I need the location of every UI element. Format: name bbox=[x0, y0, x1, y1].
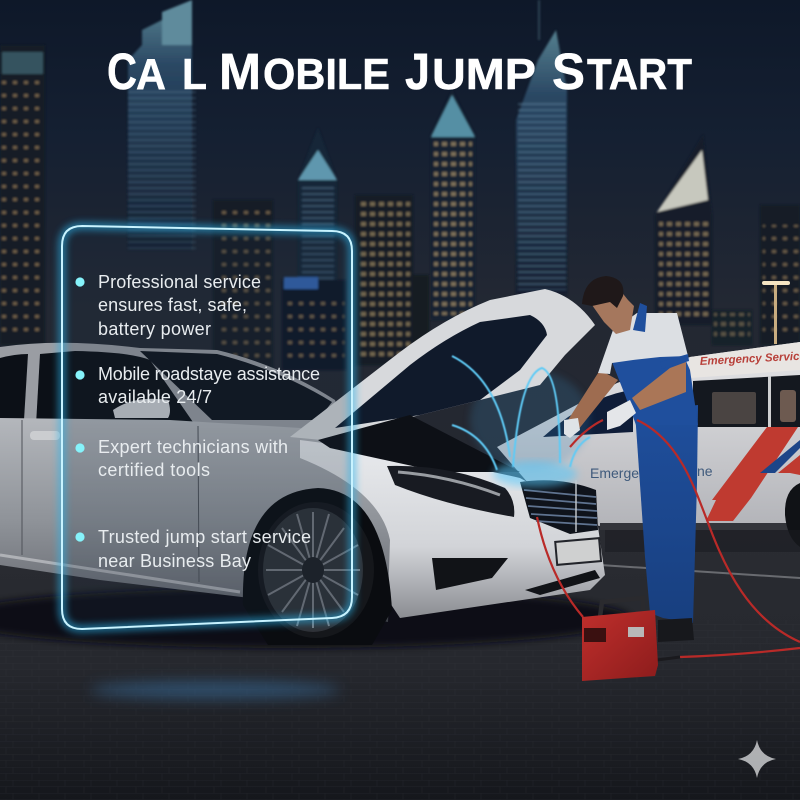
engine bay bbox=[318, 415, 520, 472]
near glove bbox=[607, 400, 636, 430]
sparkle watermark bbox=[738, 740, 776, 778]
bullet: expert technicians: certified tools bbox=[98, 460, 210, 480]
bullet: trusted service bbox=[75, 527, 311, 571]
bullet: mobile assistance: Mobile roadstaye assistance bbox=[98, 364, 320, 384]
sill highlight bbox=[0, 555, 240, 592]
blue ground reflection bbox=[90, 681, 340, 699]
front side window bbox=[36, 351, 195, 425]
bullet: trusted service: Trusted jump start service bbox=[98, 527, 311, 547]
bullet: professional service: battery power bbox=[98, 319, 211, 339]
door mirror bbox=[113, 399, 170, 418]
bullet: professional service bbox=[75, 272, 261, 339]
front wheel bbox=[258, 502, 374, 638]
car side body bbox=[0, 418, 395, 622]
car cabin and roof bbox=[0, 343, 345, 430]
rear side window bbox=[0, 354, 28, 420]
bullet: expert technicians bbox=[75, 437, 288, 480]
car front end bbox=[300, 440, 605, 618]
bullet: professional service: ensures fast, safe, bbox=[98, 295, 247, 315]
torso blue bbox=[612, 352, 698, 425]
title: C bbox=[107, 43, 137, 100]
title: L bbox=[182, 50, 207, 99]
blue energy arcs bbox=[452, 356, 590, 470]
wheel arch bbox=[243, 488, 392, 645]
far glove bbox=[564, 418, 580, 438]
far arm bbox=[568, 370, 618, 430]
paved ground bbox=[0, 530, 800, 800]
open hood underside bbox=[335, 315, 547, 428]
title: M bbox=[219, 43, 261, 100]
red jump leads bbox=[537, 420, 800, 660]
sleeve band bbox=[660, 354, 689, 369]
emergency van: Emergen bbox=[590, 465, 647, 481]
overall legs bbox=[635, 405, 698, 623]
licence plate bbox=[555, 538, 601, 565]
boot bbox=[658, 618, 694, 642]
face bbox=[592, 290, 634, 334]
energy glow at grille bbox=[493, 461, 577, 487]
lower air intakes bbox=[432, 558, 600, 595]
bullet: trusted service: near Business Bay bbox=[98, 551, 251, 571]
hair bbox=[582, 276, 623, 308]
street lamp bbox=[762, 281, 790, 344]
near arm bbox=[632, 362, 686, 410]
bullet: professional service: Professional service bbox=[98, 272, 261, 292]
title: UMP bbox=[432, 50, 536, 99]
headlight bbox=[387, 466, 514, 517]
bullet: mobile assistance: available 24/7 bbox=[98, 387, 212, 407]
emergency van: ne bbox=[697, 463, 713, 479]
door line bbox=[22, 420, 199, 582]
bullet: mobile assistance bbox=[75, 364, 320, 407]
door handle bbox=[30, 431, 60, 440]
emergency van bbox=[497, 342, 800, 552]
ground shadow under car bbox=[0, 588, 630, 648]
title: TART bbox=[587, 50, 692, 99]
man in overalls bbox=[564, 276, 698, 642]
title: S bbox=[552, 43, 585, 100]
shirt bbox=[598, 313, 688, 374]
bullet: expert technicians: Expert technicians with bbox=[98, 437, 288, 457]
white car bbox=[0, 289, 605, 645]
city skyline bbox=[0, 0, 800, 370]
energy speckle glow behind hood bbox=[470, 370, 590, 470]
title: J bbox=[405, 43, 430, 100]
glass panel bbox=[62, 226, 352, 629]
windshield bbox=[140, 351, 332, 420]
night sky background bbox=[0, 0, 800, 560]
red battery booster bbox=[582, 598, 658, 681]
collar bbox=[633, 303, 647, 332]
title: OBILE bbox=[263, 50, 390, 99]
open hood outer panel bbox=[290, 289, 595, 440]
grille bbox=[520, 480, 598, 534]
title: A bbox=[136, 50, 166, 99]
